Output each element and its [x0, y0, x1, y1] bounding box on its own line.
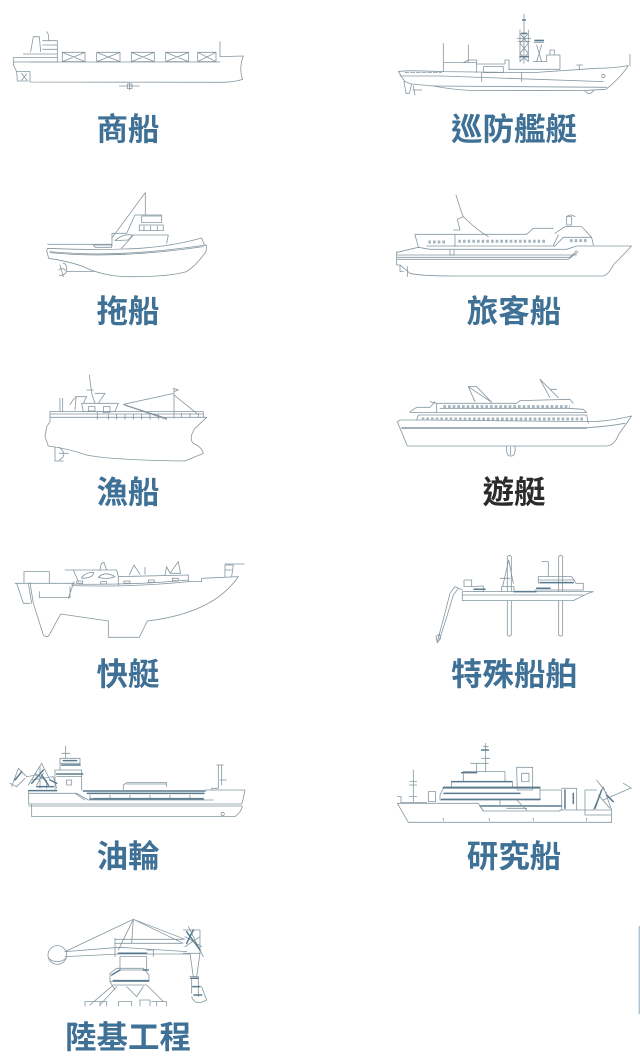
- icon: research vessel: [397, 743, 632, 822]
- icon: tugboat: [47, 193, 207, 277]
- label: 陸基工程: 陸基工程: [65, 1019, 191, 1055]
- label: 旅客船: 旅客船: [467, 293, 561, 329]
- icon: fishing boat: [45, 375, 207, 461]
- label: 商船: 商船: [96, 111, 160, 147]
- label: 特殊船舶: 特殊船舶: [451, 656, 577, 692]
- icon: dredging vessel: [436, 555, 593, 643]
- icon: frigate: [398, 14, 630, 95]
- panel: 巡防艦艇: [398, 14, 630, 147]
- icon: merchant ship: [13, 32, 243, 90]
- icon: cruise yacht: [397, 379, 632, 456]
- panel: 拖船: [47, 193, 207, 329]
- label: 拖船: 拖船: [96, 293, 160, 329]
- icon: land-based ship loader: [48, 919, 207, 1006]
- panel: 漁船: [45, 375, 207, 510]
- panel: 遊艇: [397, 379, 632, 510]
- panel: 油輪: [10, 746, 245, 874]
- panel: 旅客船: [397, 195, 632, 329]
- panel: 陸基工程: [48, 919, 207, 1055]
- label: 漁船: 漁船: [96, 474, 160, 510]
- label: 油輪: 油輪: [96, 838, 160, 874]
- icon: oil tanker: [10, 746, 245, 817]
- panel: 商船: [13, 32, 243, 147]
- label: 遊艇: 遊艇: [482, 474, 546, 510]
- panel: 研究船: [397, 743, 632, 874]
- label: 研究船: 研究船: [467, 838, 561, 874]
- panel: 特殊船舶: [436, 555, 593, 692]
- icon: passenger ship: [397, 195, 632, 277]
- panel: 快艇: [15, 562, 244, 692]
- icon: sailing yacht: [15, 562, 244, 637]
- label: 巡防艦艇: 巡防艦艇: [451, 111, 577, 147]
- label: 快艇: 快艇: [96, 656, 160, 692]
